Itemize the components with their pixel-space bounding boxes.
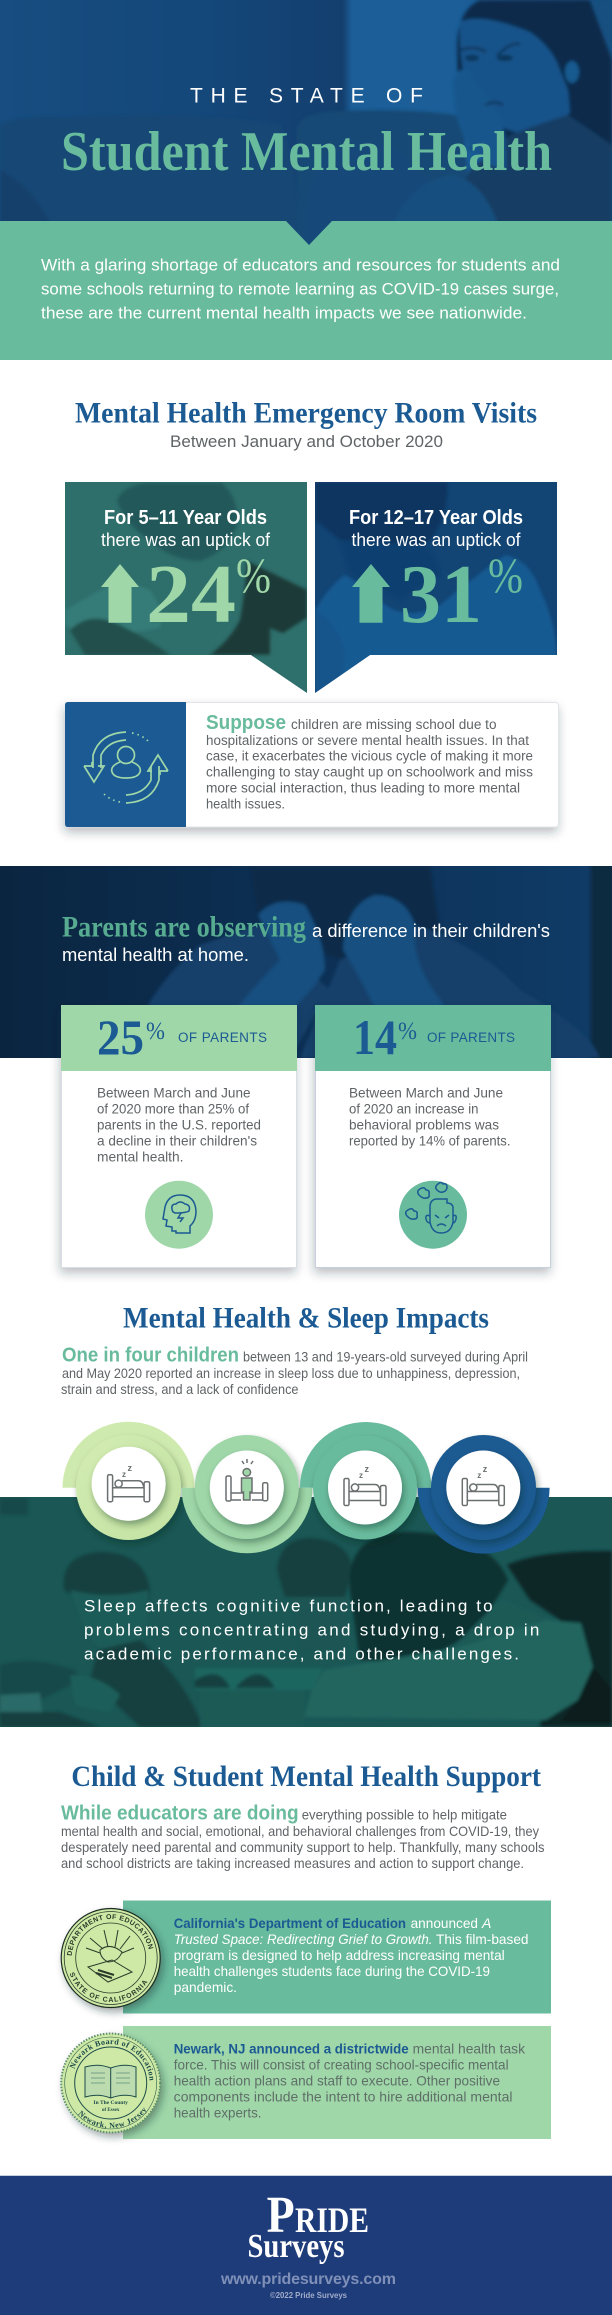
photo band: parents observing: [0, 866, 612, 1058]
sleep intro text: between 13 and 19-years-old surveyed during April: [243, 1349, 528, 1365]
California text: This film-based: [436, 1931, 528, 1947]
stat: 24 percent: %: [236, 547, 271, 603]
logo: Pride Surveys: Surveys: [248, 2228, 344, 2265]
support intro text: mental health and social, emotional, and behavioral challenges from COVID-19, they: [61, 1823, 539, 1839]
panel: California: [58, 1900, 551, 2018]
age label: For 5–11 Year Olds: [104, 507, 267, 529]
sleep intro text: strain and stress, and a lack of confidence: [61, 1381, 299, 1397]
heading: support: Child & Student Mental Health Support: [71, 1760, 541, 1793]
heading: Emergency Room Visits: Mental Health Emergency Room Visits: [75, 397, 537, 430]
icon: Newark seal: Newark, New Jersey: [78, 2108, 146, 2129]
sleep circles: [62, 1422, 550, 1554]
card text: of 2020 more than 25% of: [97, 1101, 249, 1117]
sleep statement text: academic performance, and other challenges.: [84, 1645, 519, 1664]
icon: Newark seal: [58, 2032, 168, 2142]
intro text: some schools returning to remote learning as COVID-19 cases surge,: [41, 280, 559, 299]
callout text: [206, 712, 533, 812]
card text: parents in the U.S. reported: [97, 1117, 261, 1133]
icon: Newark seal: of Essex: [102, 2108, 120, 2113]
support intro text: [61, 1803, 544, 1871]
support intro text: and school districts are taking increased measures and action to support change.: [61, 1855, 524, 1871]
logo: Pride Surveys: P: [267, 2187, 295, 2244]
intro panel: [0, 221, 612, 360]
icon: up arrow: [101, 564, 139, 623]
sleep statement text: [84, 1597, 539, 1664]
heading: parents are observing: mental health at home.: [62, 945, 249, 965]
California text: Trusted Space: Redirecting Grief to Growth.: [174, 1931, 432, 1947]
card text: [349, 1085, 510, 1149]
age label: For 12–17 Year Olds: [349, 507, 523, 529]
circle 4: sleeping: z: [477, 1471, 481, 1480]
Newark text: [174, 2040, 526, 2121]
California text: pandemic.: [174, 1979, 237, 1995]
callout text: case, it exacerbates the vicious cycle of making it more: [206, 749, 533, 764]
icon: California seal: DEPARTMENT OF EDUCATION: [66, 1914, 154, 1956]
circle 4: sleeping: [418, 1435, 550, 1554]
support intro text: desperately need parental and community support to help. Thankfully, many schools: [61, 1839, 544, 1855]
sleep statement text: problems concentrating and studying, a drop in: [84, 1621, 539, 1640]
Newark text: health action plans and staff to execute. Other positive: [174, 2073, 500, 2089]
circle 3: sleeping: z: [364, 1464, 370, 1474]
intro text: these are the current mental health impacts we see nationwide.: [41, 304, 527, 323]
intro text: With a glaring shortage of educators and resources for students and: [41, 256, 560, 275]
title: Student Mental Health: Student Mental Health: [61, 121, 552, 183]
sleep intro text: and May 2020 reported an increase in sleep loss due to unhappiness, depression,: [62, 1365, 520, 1381]
stat: 31 percent: 31: [400, 548, 482, 641]
Newark text: mental health task: [413, 2040, 526, 2056]
panel: 12-17 year olds: [315, 482, 557, 693]
circle 3: sleeping: [300, 1422, 431, 1540]
Newark text: force. This will consist of creating school-specific mental: [174, 2057, 509, 2073]
callout text: more social interaction, thus leading to more mental: [206, 781, 520, 796]
callout text: children are missing school due to: [291, 717, 496, 732]
uptick label: there was an uptick of: [101, 530, 271, 550]
panel: 14 percent of parents: [315, 1005, 551, 1268]
card text: Between March and June: [97, 1085, 251, 1101]
panel: suppose callout: [65, 702, 558, 827]
photo band: sleeping students: [0, 1497, 612, 1727]
California text: health challenges students face during the COVID-19: [174, 1963, 490, 1979]
sleep intro text: [61, 1345, 528, 1397]
California text: announced: [411, 1915, 478, 1931]
California text: [174, 1915, 528, 1995]
icon: head with storm cloud: [145, 1181, 213, 1249]
card text: Between March and June: [349, 1085, 503, 1101]
panel: Newark: [58, 2026, 551, 2142]
icon: up arrow: [352, 564, 390, 623]
panel: 25 percent of parents: [61, 1005, 297, 1268]
heading: parents are observing: a difference in their children's: [312, 921, 550, 941]
circle 4: sleeping: z: [483, 1464, 488, 1474]
card text: [97, 1085, 261, 1165]
heading: parents are observing: Parents are observing: [62, 911, 306, 944]
stat: 31 percent: [400, 547, 523, 641]
heading: sleep impacts: Mental Health & Sleep Impacts: [123, 1302, 489, 1335]
California text: California's Department of Education: [174, 1915, 406, 1931]
stat: 25 percent: 25: [97, 1009, 144, 1065]
callout text: Suppose: [206, 712, 286, 734]
card text: a decline in their children's: [97, 1133, 257, 1149]
icon: California seal: STATE OF CALIFORNIA: [70, 1972, 148, 2002]
icon: California seal: [58, 1906, 168, 2018]
label: of parents: OF PARENTS: [427, 1030, 515, 1045]
icon: Newark seal: Newark Board of Education: [70, 2039, 154, 2081]
circle 1: sleeping: z: [128, 1463, 132, 1473]
logo: Pride Surveys: RIDE: [295, 2200, 369, 2240]
copyright: ©2022 Pride Surveys: [270, 2290, 347, 2300]
icon: person in cycle arrows: [84, 732, 168, 803]
circle 1: sleeping: z: [122, 1470, 126, 1479]
callout text: challenging to stay caught up on schoolwork and miss: [206, 765, 533, 780]
card text: of 2020 an increase in: [349, 1101, 478, 1117]
icon: angry face: [399, 1181, 467, 1249]
subheading: date range: Between January and October 2020: [170, 432, 443, 451]
label: of parents: OF PARENTS: [178, 1030, 267, 1045]
stat: 14 percent: %: [398, 1018, 417, 1045]
stat: 24 percent: [146, 547, 271, 641]
callout text: hospitalizations or severe mental health issues. In that: [206, 733, 529, 748]
Newark text: components include the intent to hire additional mental: [174, 2089, 512, 2105]
footer: [0, 2175, 612, 2315]
stat: 31 percent: %: [488, 547, 523, 603]
circle 3: sleeping: z: [359, 1471, 363, 1480]
support intro text: everything possible to help mitigate: [302, 1807, 507, 1823]
website url: www.pridesurveys.com: [220, 2271, 396, 2288]
stat: 14 percent: 14: [353, 1009, 397, 1065]
stat: 25 percent: %: [146, 1018, 165, 1045]
California text: A: [481, 1915, 491, 1931]
card text: mental health.: [97, 1149, 184, 1165]
circle 2: awake sitting: [182, 1435, 312, 1553]
icon: Newark seal: In The County: [93, 2100, 128, 2106]
callout text: health issues.: [206, 797, 285, 812]
California text: program is designed to help address increasing mental: [174, 1947, 505, 1963]
logo: Pride Surveys: [248, 2187, 369, 2265]
Newark text: Newark, NJ announced a districtwide: [174, 2040, 409, 2056]
card text: reported by 14% of parents.: [349, 1133, 510, 1149]
hero photo: girl on sofa: [0, 0, 612, 250]
sleep statement text: Sleep affects cognitive function, leading to: [84, 1597, 493, 1616]
intro text: [41, 256, 560, 323]
heading: The State Of: THE STATE OF: [190, 85, 423, 108]
panel: 5-11 year olds: [65, 482, 307, 693]
sleep intro text: One in four children: [62, 1345, 239, 1367]
heading: parents are observing: [62, 911, 550, 965]
uptick label: there was an uptick of: [352, 530, 521, 550]
Newark text: health experts.: [174, 2105, 262, 2121]
circle 1: sleeping: [62, 1422, 194, 1540]
card text: behavioral problems was: [349, 1117, 499, 1133]
stat: 24 percent: 24: [146, 548, 236, 641]
support intro text: While educators are doing: [61, 1803, 299, 1825]
